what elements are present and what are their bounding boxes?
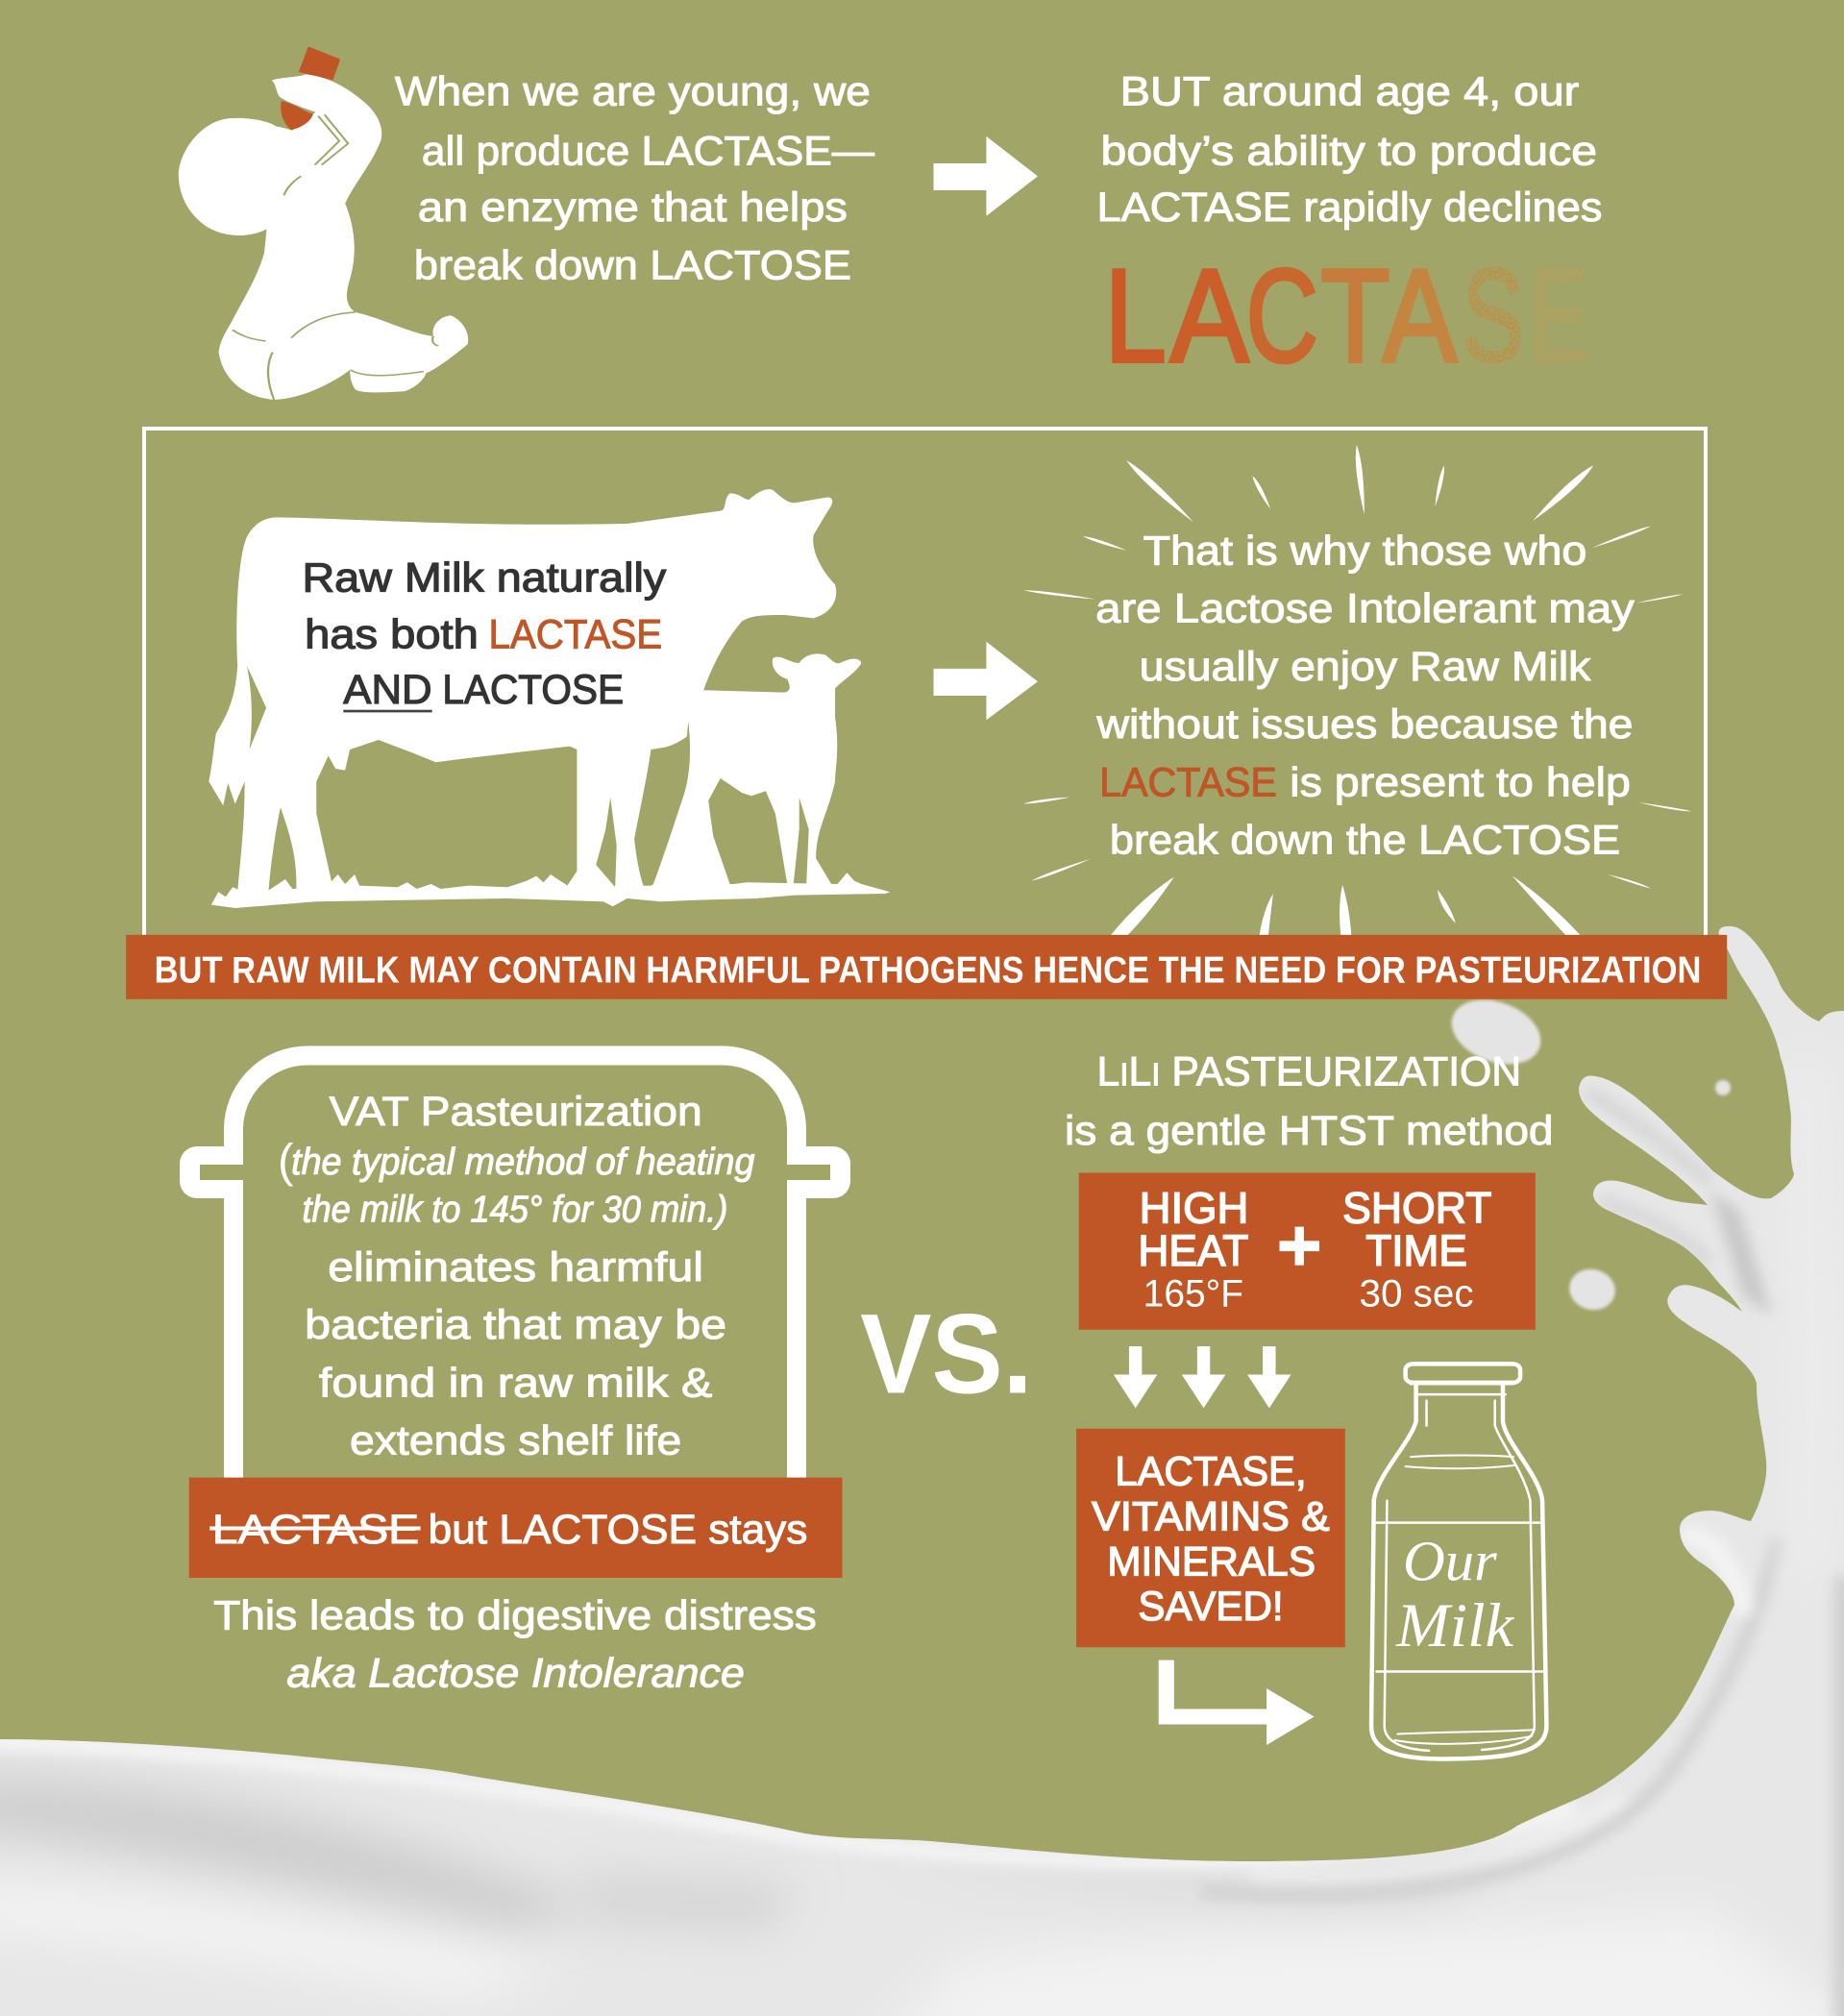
text: around age 4 bbox=[1097, 69, 1602, 231]
arrows: three down bbox=[1114, 1346, 1291, 1408]
panel: high heat short time: HIGH bbox=[1140, 1184, 1248, 1233]
text: vat pasteurization: eliminates harmful bbox=[328, 1244, 703, 1291]
heading: fading lactase: S bbox=[1463, 242, 1524, 390]
text: why lactose intolerant can enjoy raw milk: break down the LACTOSE bbox=[1110, 818, 1620, 864]
heading: fading lactase: L bbox=[1105, 242, 1167, 390]
text: raw milk in cow: AND bbox=[343, 667, 432, 713]
panel: high heat short time: 30 sec bbox=[1359, 1272, 1474, 1315]
text: why lactose intolerant can enjoy raw milk: without issues because the bbox=[1095, 701, 1634, 748]
text: vat pasteurization bbox=[278, 1089, 755, 1464]
rays around text bbox=[1023, 445, 1692, 942]
text: around age 4: BUT around age 4, our bbox=[1120, 69, 1579, 115]
panel: raw milk box outline bbox=[144, 429, 1706, 942]
text: digestive distress bbox=[213, 1593, 817, 1697]
heading: fading lactase: A bbox=[1383, 242, 1457, 390]
banner: lactase destroyed: but LACTOSE stays bbox=[429, 1507, 807, 1553]
panel: lactase vitamins minerals saved: SAVED! bbox=[1138, 1584, 1284, 1630]
text: raw milk in cow: Raw Milk naturally bbox=[302, 555, 667, 602]
text: why lactose intolerant can enjoy raw milk bbox=[1095, 528, 1635, 864]
text: vat pasteurization: found in raw milk & bbox=[319, 1360, 712, 1406]
panel: lactase vitamins minerals saved: VITAMINS & bbox=[1092, 1493, 1330, 1539]
arrow: elbow to bottle bbox=[1159, 1660, 1315, 1745]
text: raw milk in cow: LACTASE bbox=[489, 611, 662, 657]
text: vs: VS. bbox=[860, 1290, 1033, 1416]
banner: lactase destroyed bbox=[189, 1478, 843, 1578]
text: lili pasteurization: is a gentle HTST method bbox=[1065, 1108, 1554, 1154]
panel: lactase vitamins minerals saved bbox=[1076, 1429, 1345, 1647]
bottle top bbox=[299, 46, 340, 80]
cow silhouette bbox=[209, 489, 836, 892]
text: around age 4: body’s ability to produce bbox=[1101, 128, 1597, 174]
text: vat pasteurization: extends shelf life bbox=[350, 1418, 681, 1464]
text: vat pasteurization: the typical method of heating bbox=[291, 1142, 755, 1183]
heading: fading lactase: C bbox=[1246, 242, 1318, 390]
grass bbox=[211, 873, 890, 908]
text: our milk bottle label: Our bbox=[1403, 1531, 1498, 1593]
text: vat pasteurization: VAT Pasteurization bbox=[330, 1089, 702, 1135]
icon: milk bottle bbox=[1371, 1364, 1546, 1759]
text: why lactose intolerant can enjoy raw milk: is present to help bbox=[1290, 759, 1631, 805]
text: vat pasteurization: ( bbox=[278, 1134, 294, 1187]
icon: vat pot outline bbox=[180, 1055, 850, 1485]
panel: high heat short time: HEAT bbox=[1138, 1226, 1248, 1275]
text: why lactose intolerant can enjoy raw milk: That is why those who bbox=[1143, 528, 1586, 574]
heading: fading lactase: T bbox=[1320, 242, 1390, 390]
text: digestive distress: This leads to digestive distress bbox=[213, 1593, 817, 1639]
text: lactase when young: When we are young, we bbox=[395, 69, 871, 115]
panel: lactase vitamins minerals saved: MINERALS bbox=[1107, 1538, 1315, 1585]
arrow: top right bbox=[934, 136, 1038, 216]
text: lactase when young: break down LACTOSE bbox=[414, 242, 851, 288]
text: lili pasteurization bbox=[1065, 1048, 1554, 1154]
text: digestive distress: aka Lactose Intolerance bbox=[286, 1651, 745, 1697]
icon: cow and calf silhouette bbox=[209, 489, 890, 908]
text: lili pasteurization: LILI PASTEURIZATION bbox=[1097, 1048, 1521, 1094]
panel: lactase vitamins minerals saved: LACTASE, bbox=[1115, 1449, 1307, 1495]
text: vat pasteurization: bacteria that may be bbox=[305, 1302, 726, 1348]
text: our milk bottle label bbox=[1395, 1531, 1515, 1660]
milk splash and wave bbox=[0, 913, 1844, 2016]
banner: pathogens warning: BUT RAW MILK MAY CONTAIN HARMFUL PATHOGENS HENCE THE NEED FOR PASTEURIZATION bbox=[155, 949, 1701, 991]
arrow: middle bbox=[934, 642, 1038, 720]
heading: fading lactase: E bbox=[1530, 242, 1588, 390]
text: raw milk in cow: LACTOSE bbox=[442, 667, 624, 713]
text: raw milk in cow bbox=[302, 555, 667, 713]
text: raw milk in cow: has both bbox=[305, 611, 479, 657]
text: lactase when young bbox=[395, 69, 874, 288]
text: our milk bottle label: Milk bbox=[1395, 1591, 1515, 1660]
text: vat pasteurization: the milk to 145° for 30 min.) bbox=[302, 1189, 727, 1230]
calf silhouette bbox=[652, 653, 861, 891]
panel: high heat short time: 165°F bbox=[1143, 1272, 1243, 1315]
heading: fading lactase bbox=[1105, 242, 1588, 390]
olive gaps between legs bbox=[247, 666, 809, 891]
banner: lactase destroyed: LACTASE bbox=[212, 1507, 419, 1553]
banner: pathogens warning bbox=[126, 935, 1727, 999]
text: lactase when young: all produce LACTASE— bbox=[422, 128, 874, 174]
heading: fading lactase: A bbox=[1170, 242, 1248, 390]
text: why lactose intolerant can enjoy raw milk: usually enjoy Raw Milk bbox=[1140, 644, 1591, 690]
panel: high heat short time: SHORT bbox=[1342, 1184, 1491, 1233]
icon: baby drinking from bottle bbox=[179, 46, 468, 400]
text: lactase when young: an enzyme that helps bbox=[418, 184, 848, 231]
milk droplets bbox=[1442, 988, 1731, 1315]
panel: high heat short time: TIME bbox=[1365, 1226, 1467, 1275]
text: why lactose intolerant can enjoy raw milk: LACTASE bbox=[1099, 759, 1277, 805]
panel: high heat short time bbox=[1079, 1172, 1536, 1330]
text: why lactose intolerant can enjoy raw milk: are Lactose Intolerant may bbox=[1095, 586, 1635, 632]
text: around age 4: LACTASE rapidly declines bbox=[1097, 184, 1602, 231]
